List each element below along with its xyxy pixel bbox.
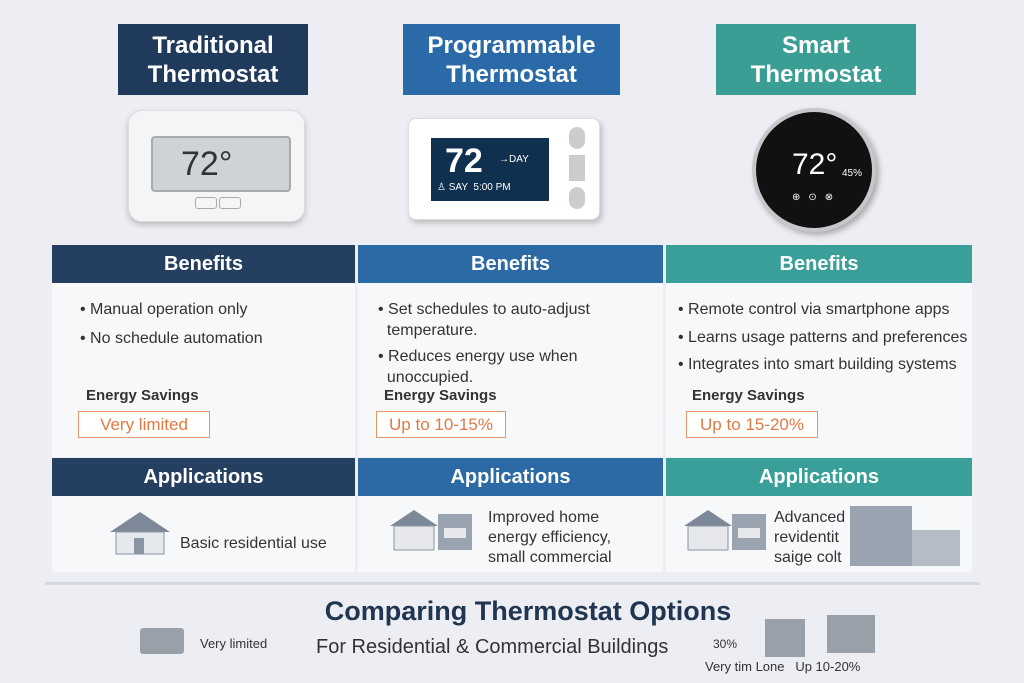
header: benefits: Benefits (164, 253, 243, 275)
icon: programmable thermostat: ♙ SAY 5:00 PM (437, 182, 511, 193)
icon: smart thermostat: 72° (792, 148, 837, 181)
panel: benefits: unoccupied. (387, 369, 473, 386)
panel: benefits (52, 283, 355, 457)
header: applications (358, 458, 663, 496)
title: traditional: Thermostat (148, 60, 278, 88)
panel: benefits: Energy Savings (384, 387, 497, 404)
legend right: 30% (713, 637, 737, 651)
title: smart (716, 24, 916, 95)
panel: applications: Basic residential use (180, 535, 327, 552)
panel: applications (358, 496, 663, 572)
legend right (705, 615, 875, 674)
icon: traditional thermostat (128, 110, 305, 222)
panel: applications: energy efficiency, (488, 529, 611, 546)
header: applications: Applications (143, 466, 264, 488)
icon: smart thermostat: 45% (842, 168, 862, 179)
header: benefits (666, 245, 972, 283)
subtitle: For Residential & Commercial Buildings (316, 636, 668, 658)
column 2 (358, 245, 663, 572)
icon: programmable thermostat: →DAY (499, 154, 529, 165)
panel: benefits: • Reduces energy use when (378, 348, 578, 365)
panel: benefits: Very limited (100, 415, 188, 434)
main title: Comparing Thermostat Options (325, 596, 731, 626)
panel: benefits: • Learns usage patterns and preferences (678, 329, 967, 346)
icon: smart thermostat (752, 108, 876, 232)
legend left: Very limited (200, 636, 267, 651)
title: programmable: Thermostat (446, 60, 577, 88)
header: benefits: Benefits (780, 253, 858, 275)
panel: benefits: • Manual operation only (80, 301, 247, 318)
panel: benefits: temperature. (387, 322, 478, 339)
panel: benefits: Energy Savings (86, 387, 199, 404)
header: applications: Applications (450, 466, 570, 488)
panel: benefits: • Remote control via smartphone apps (678, 301, 950, 318)
panel: applications: small commercial (488, 549, 612, 566)
panel: benefits (358, 283, 663, 457)
title: programmable: Programmable (427, 32, 596, 58)
icon: smart thermostat: ⊕⊙⊗ (792, 192, 841, 203)
legend right: Very tim Lone Up 10-20% (705, 659, 860, 674)
panel: benefits: Up to 10-15% (389, 415, 493, 434)
header: benefits (52, 245, 355, 283)
title: traditional (118, 24, 308, 95)
panel: applications: saige colt (774, 549, 842, 566)
panel: benefits: Energy Savings (692, 387, 805, 404)
header: applications (52, 458, 355, 496)
panel: applications: Advanced (774, 509, 845, 526)
icon: traditional thermostat: 72° (181, 145, 232, 183)
column 3 (666, 245, 972, 572)
panel: applications: revidentit (774, 529, 839, 546)
title: smart: Smart (782, 32, 850, 58)
header: applications: Applications (759, 466, 879, 488)
panel: benefits (666, 283, 972, 457)
header: benefits (358, 245, 663, 283)
panel: applications (52, 496, 355, 572)
panel: benefits: • Set schedules to auto-adjust (378, 301, 590, 318)
panel: benefits: Up to 15-20% (700, 415, 804, 434)
title: smart: Thermostat (751, 60, 881, 88)
column 1 (52, 245, 355, 572)
legend left (140, 628, 267, 654)
icon: programmable thermostat: 72 (445, 142, 483, 180)
panel: applications (666, 496, 972, 572)
panel: applications: Improved home (488, 509, 599, 526)
header: benefits: Benefits (471, 253, 550, 275)
header: applications (666, 458, 972, 496)
title: traditional: Traditional (152, 32, 274, 58)
panel: benefits: • Integrates into smart building systems (678, 356, 957, 373)
divider (45, 582, 980, 585)
panel: benefits: • No schedule automation (80, 330, 263, 347)
title: programmable (403, 24, 620, 95)
icon: programmable thermostat (408, 118, 600, 220)
